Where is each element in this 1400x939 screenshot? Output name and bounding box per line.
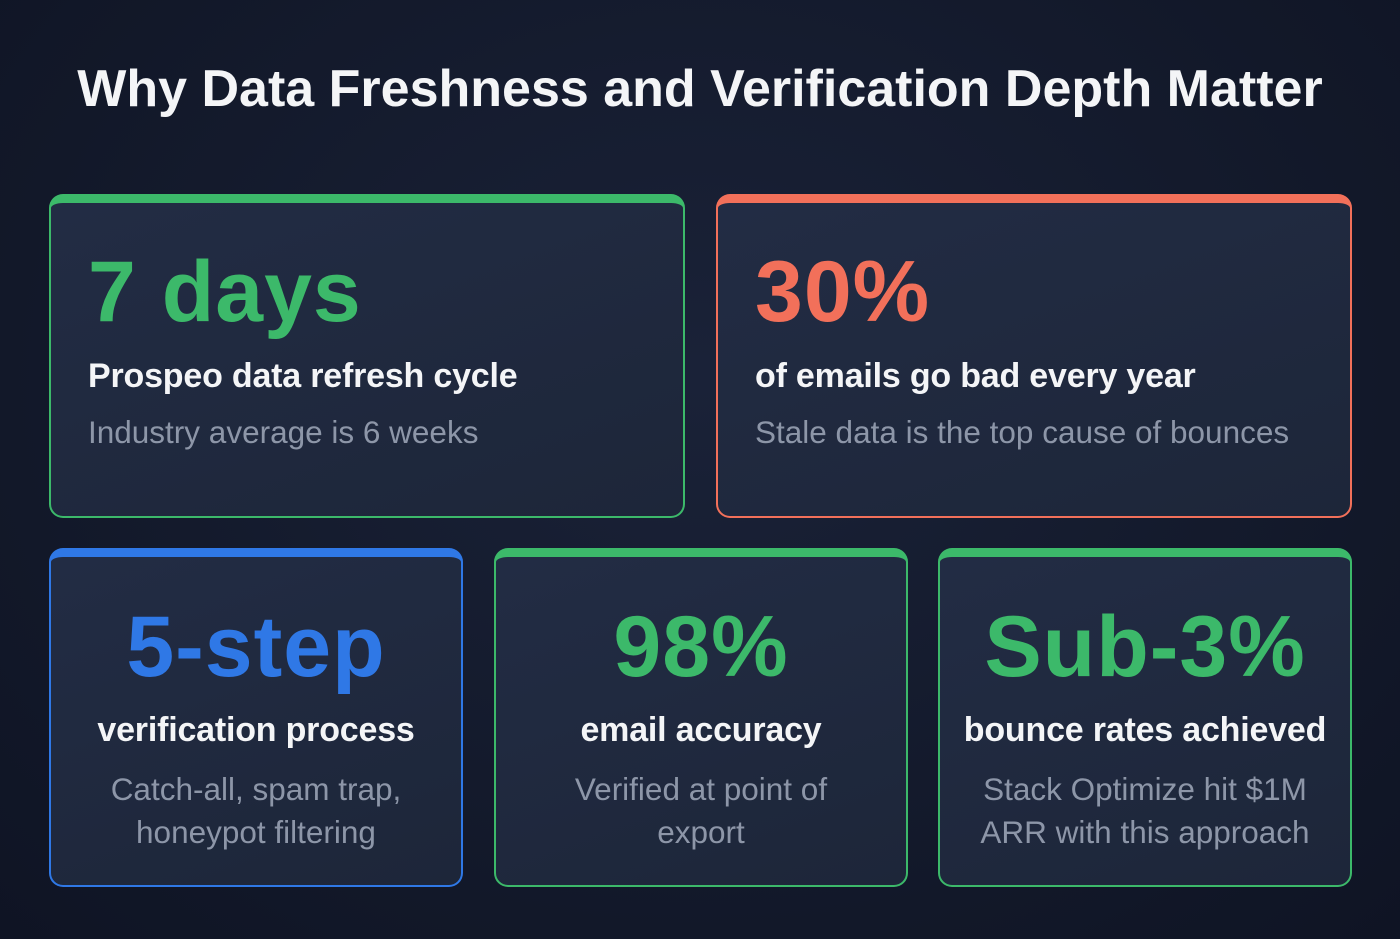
- subtitle: bounce rates achieved: [964, 711, 1326, 749]
- panel: refresh cycle: [49, 194, 685, 518]
- description: ARR with this approach: [980, 814, 1310, 850]
- description: Industry average is 6 weeks: [88, 414, 478, 450]
- description: export: [657, 814, 745, 850]
- description: [575, 771, 828, 850]
- description: [980, 771, 1310, 850]
- stat: 5-step: 5-step: [126, 599, 386, 695]
- subtitle: of emails go bad every year: [755, 357, 1196, 395]
- panel: accuracy: [494, 548, 908, 887]
- panel: verification: [49, 548, 463, 887]
- subtitle: email accuracy: [580, 711, 822, 749]
- panel: bounce rates: [938, 548, 1352, 887]
- description: [111, 771, 401, 850]
- description: honeypot filtering: [136, 814, 376, 850]
- description: Stale data is the top cause of bounces: [755, 414, 1289, 450]
- subtitle: verification process: [97, 711, 415, 749]
- description: Stack Optimize hit $1M: [983, 771, 1307, 807]
- description: Verified at point of: [575, 771, 827, 807]
- stat: 98%: 98%: [613, 599, 789, 695]
- stat: Sub-3%: Sub-3%: [984, 599, 1306, 695]
- panel: email decay: [716, 194, 1352, 518]
- stat: 30%: 30%: [755, 244, 930, 340]
- description: Catch-all, spam trap,: [111, 771, 401, 807]
- stat: 7 days: 7 days: [88, 244, 362, 340]
- subtitle: Prospeo data refresh cycle: [88, 357, 517, 395]
- title: Why Data Freshness and Verification Depth Matter: [77, 60, 1323, 118]
